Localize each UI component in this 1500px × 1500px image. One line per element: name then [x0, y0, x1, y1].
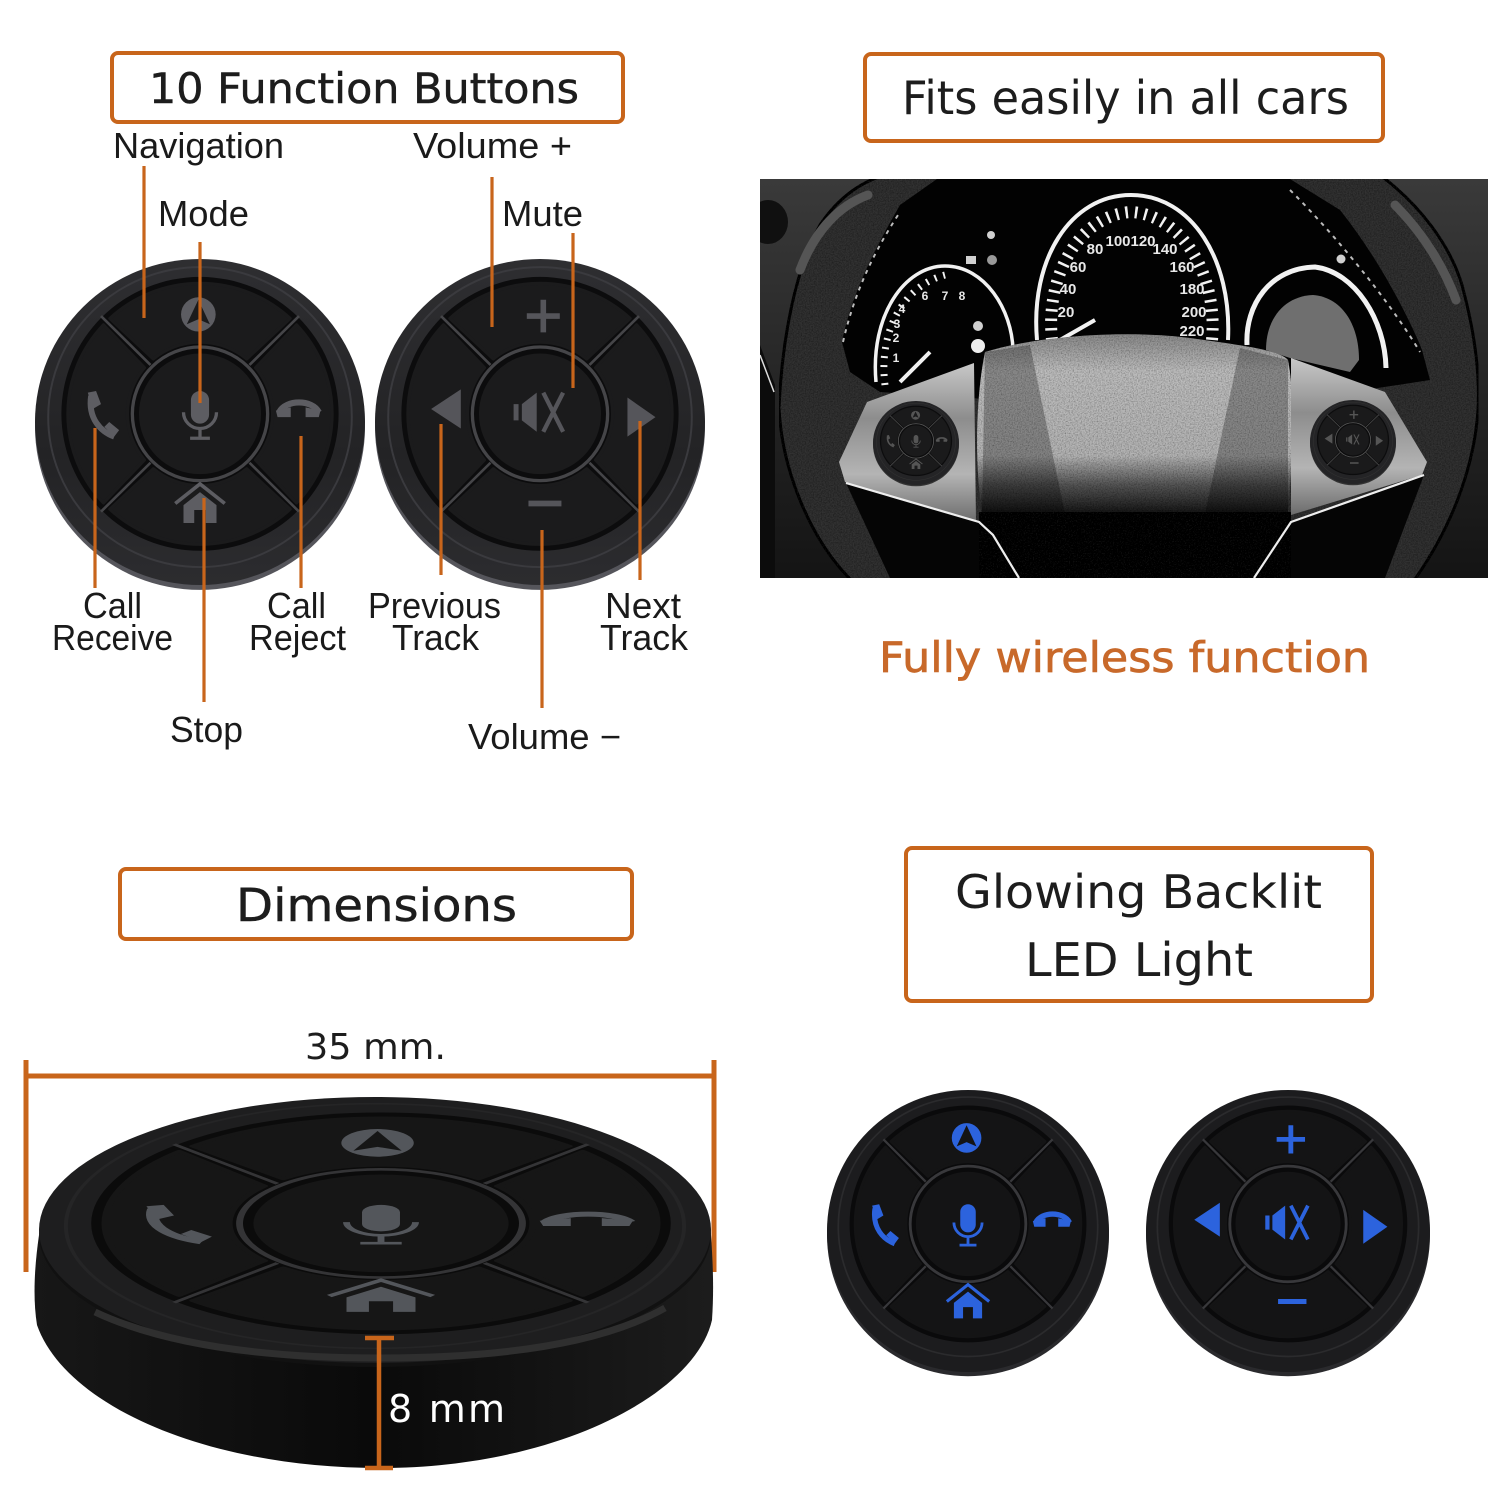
gauge numerals: 3 — [894, 317, 901, 331]
horn pad — [977, 334, 1293, 518]
gauge numerals: 7 — [942, 289, 949, 303]
heading: dimensions — [120, 869, 632, 939]
heading: glowing backlit LED light: LED Light — [1025, 933, 1253, 987]
bottom of hub — [979, 512, 1291, 578]
gauge: tachometer — [875, 266, 1013, 385]
gauge numerals: 80 — [1087, 241, 1103, 258]
button labels: Mute — [502, 193, 583, 234]
lower spoke shadows — [846, 475, 1424, 578]
gauge numerals: 200 — [1181, 304, 1207, 321]
warning lights — [966, 231, 1346, 353]
gauge numerals: 1 — [893, 351, 900, 365]
button labels: Volume + — [413, 125, 572, 166]
front rim highlight — [95, 1308, 665, 1358]
gauge numerals: 60 — [1070, 259, 1086, 276]
gauge numerals: 160 — [1169, 259, 1195, 276]
heading: glowing backlit LED light — [906, 848, 1372, 1001]
wheel rim — [779, 175, 1478, 582]
gauge numerals: 4 — [899, 302, 906, 316]
gauge numerals: 20 — [1058, 304, 1074, 321]
remote: backlit right pad — [1146, 1090, 1430, 1376]
button labels: Track — [392, 617, 480, 658]
dimension: 35 mm width — [26, 1027, 714, 1272]
button labels: Call — [267, 585, 326, 626]
button labels: Mode — [158, 193, 249, 234]
heading: 10 function buttons: 10 Function Buttons — [149, 64, 579, 113]
gauge: speedometer — [1036, 195, 1228, 340]
caption: fully wireless function: Fully wireless function — [879, 633, 1370, 682]
gauge numerals: 100 — [1105, 233, 1131, 250]
button labels: Track — [600, 617, 689, 658]
photo: steering wheel with mounted remotes — [748, 175, 1488, 582]
dimension: 8 mm height — [365, 1338, 505, 1468]
dashboard vent — [760, 200, 788, 244]
instrument panel — [842, 179, 1430, 400]
button labels: Next — [605, 585, 681, 626]
button labels: Volume − — [468, 716, 621, 757]
gauge numerals — [893, 233, 1207, 365]
puck top face — [39, 1097, 711, 1367]
button labels — [52, 125, 689, 757]
button labels: Navigation — [113, 125, 284, 166]
dimension: 8 mm height: 8 mm — [388, 1387, 505, 1431]
remote: backlit left pad — [827, 1090, 1109, 1376]
button labels: Call — [83, 585, 142, 626]
button labels: Stop — [170, 709, 243, 750]
gauge numerals: 2 — [893, 331, 900, 345]
button labels: Receive — [52, 617, 173, 658]
gauge numerals: 6 — [922, 289, 929, 303]
small remote right — [1310, 400, 1396, 485]
heading: fits easily in all cars — [865, 54, 1383, 141]
gauge numerals: 180 — [1179, 281, 1205, 298]
product photo: remote in perspective — [35, 1097, 713, 1468]
button labels: Reject — [249, 617, 346, 658]
heading: dimensions: Dimensions — [236, 879, 517, 932]
puck side wall — [35, 1235, 713, 1468]
heading: glowing backlit LED light: Glowing Backlit — [955, 865, 1322, 919]
gauge numerals: 140 — [1152, 241, 1178, 258]
callout lines: button leaders — [95, 166, 640, 708]
gauge numerals: 120 — [1130, 233, 1156, 250]
heading: fits easily in all cars: Fits easily in all cars — [902, 71, 1349, 125]
heading: 10 function buttons — [112, 53, 623, 122]
gauge numerals: 40 — [1060, 281, 1076, 298]
remote: right button pad — [375, 259, 705, 590]
left spoke — [839, 363, 976, 522]
gauge numerals: 220 — [1179, 323, 1205, 340]
rim gloss — [800, 195, 1456, 300]
remote: left button pad — [35, 259, 365, 590]
dimension: 35 mm width: 35 mm. — [305, 1027, 446, 1068]
horn pad side shading — [982, 345, 1288, 514]
gauge: fuel dial — [1247, 267, 1386, 372]
button labels: Previous — [368, 585, 501, 626]
gauge numerals: 8 — [959, 289, 966, 303]
right spoke — [1291, 358, 1427, 515]
small remote left — [873, 401, 959, 486]
spoke highlights — [846, 475, 1424, 578]
